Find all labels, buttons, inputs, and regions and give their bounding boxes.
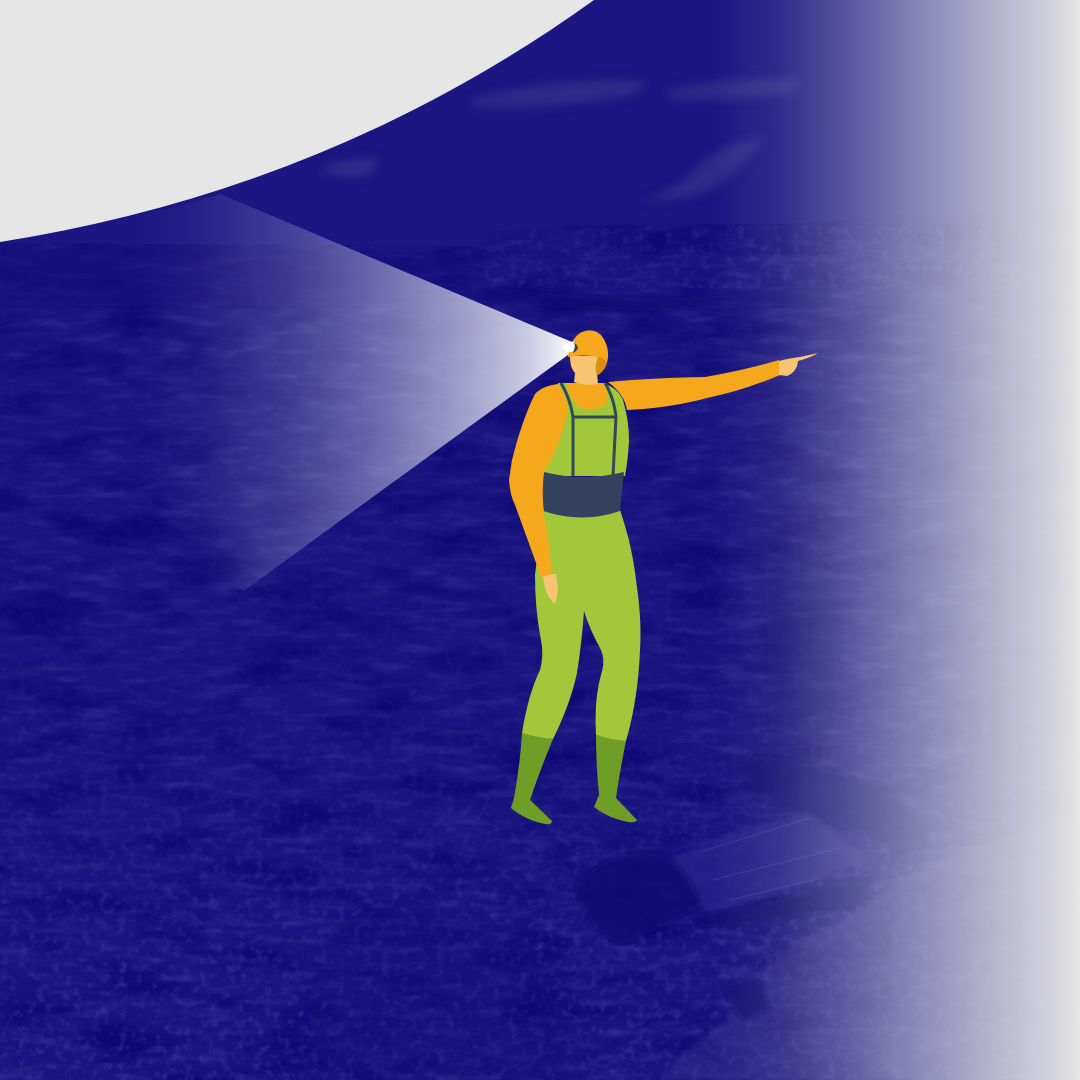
- icon: headlamp: [562, 342, 578, 353]
- icon: face and neck: [570, 356, 598, 385]
- icon: left boot: [511, 733, 553, 824]
- icon: suspenders: [561, 383, 616, 476]
- icon: pointing arm: [608, 360, 780, 410]
- icon: chest shirt: [566, 383, 608, 409]
- icon: pants and bib: [522, 510, 640, 741]
- headlamp light beam: [178, 194, 572, 590]
- icon: torso bib: [543, 383, 629, 476]
- grey curved panel: [0, 0, 594, 242]
- miner figure: [509, 330, 818, 824]
- icon: hard hat: [568, 330, 608, 375]
- background: night sky: [0, 0, 1080, 250]
- boulders: [575, 756, 1080, 1080]
- canyon rock strata texture: [0, 224, 910, 1080]
- icon: belt: [542, 472, 624, 518]
- clouds: [320, 79, 800, 202]
- icon: right boot: [594, 735, 637, 822]
- icon: pointing hand: [779, 353, 818, 376]
- icon: left hand: [543, 574, 558, 604]
- icon: left arm: [509, 384, 568, 577]
